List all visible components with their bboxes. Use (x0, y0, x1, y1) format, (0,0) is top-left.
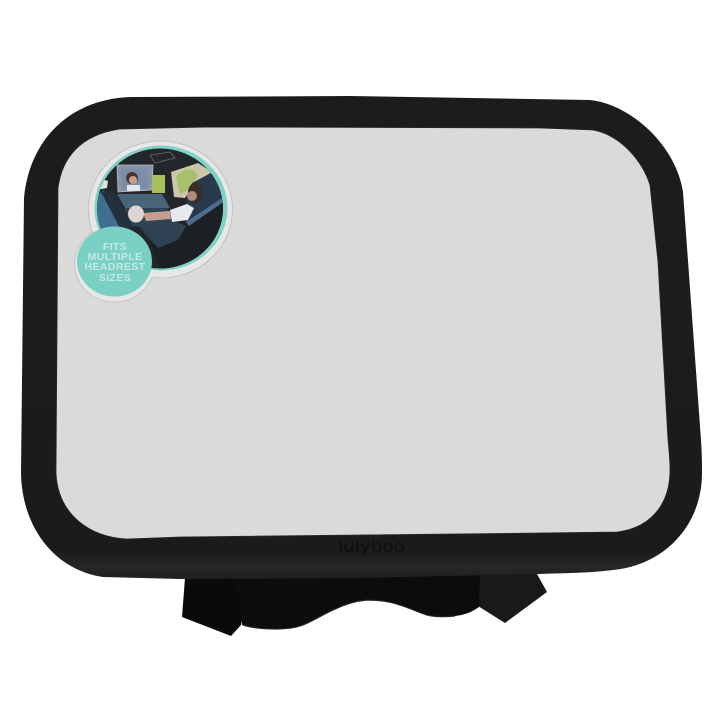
mirror surface (56, 127, 670, 539)
badge text: MULTIPLE (88, 251, 142, 263)
mount bracket (235, 574, 480, 629)
teal ring (94, 146, 228, 270)
brand logo: lulyboo (338, 537, 405, 556)
child (188, 183, 202, 203)
sticker backing (88, 141, 232, 278)
sticker (74, 141, 232, 302)
seat back (97, 190, 120, 229)
rear seat bench (117, 194, 170, 208)
badge text (85, 241, 146, 284)
car interior photo (94, 148, 225, 270)
sun visor (150, 152, 175, 163)
window (171, 163, 212, 198)
left strap (182, 578, 245, 636)
badge text: FITS (103, 241, 127, 253)
car seat shell (186, 173, 222, 222)
mirror frame (21, 96, 702, 579)
lower car seat base (160, 202, 223, 268)
teal badge (77, 226, 152, 296)
headrest straps and mount (182, 574, 547, 636)
badge text: HEADREST (85, 261, 146, 273)
badge text: SIZES (99, 272, 131, 284)
child's dark legs (140, 220, 186, 248)
right strap (470, 574, 547, 623)
baby mirror (117, 165, 153, 192)
